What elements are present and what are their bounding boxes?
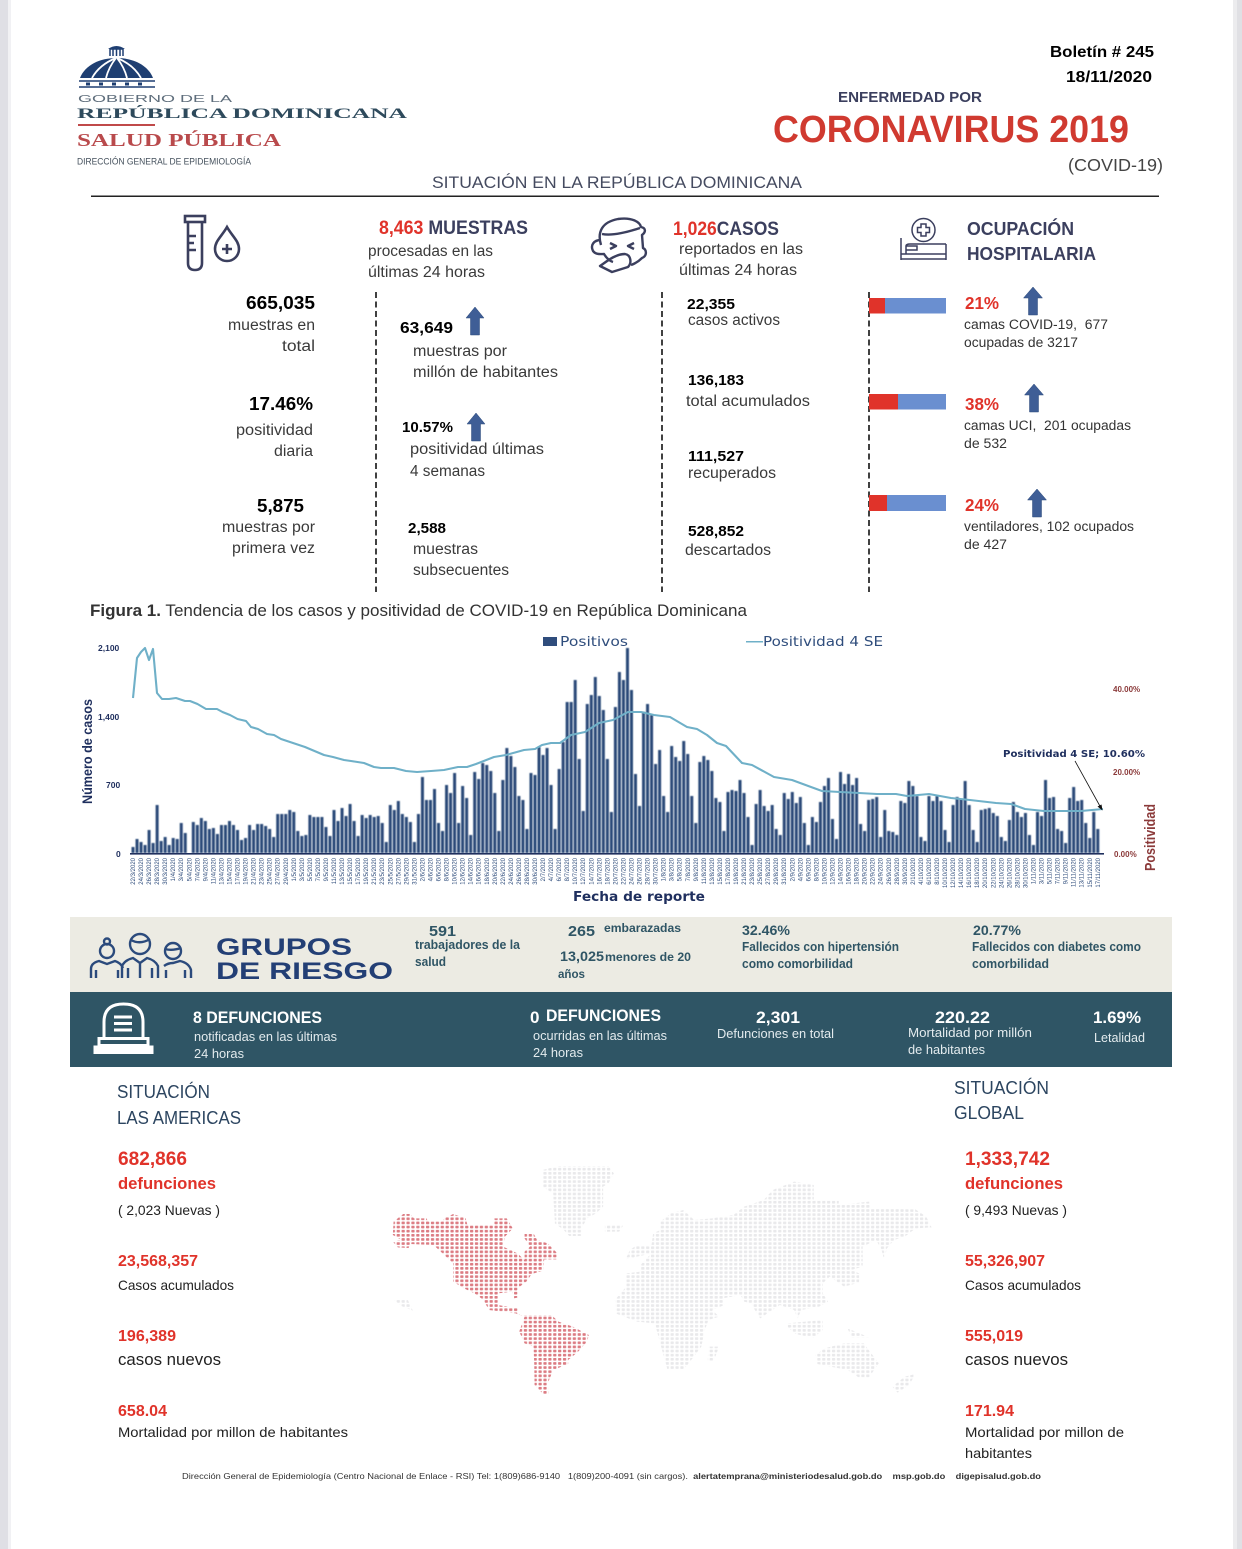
date axis labels: 8/7/2020 bbox=[565, 857, 571, 881]
stat: hypertension comorbidity: 32.46% bbox=[742, 922, 791, 938]
stat: diabetes comorbidity: Fallecidos con diabetes como bbox=[972, 940, 1141, 954]
panel: samples summary: últimas 24 horas bbox=[368, 264, 485, 281]
date axis labels: 15/5/2020 bbox=[348, 857, 354, 885]
date axis labels: 26/9/2020 bbox=[887, 857, 893, 885]
right axis labels: 20.00% bbox=[1113, 768, 1140, 777]
stat: pregnant and minors: 13,025 bbox=[560, 948, 604, 964]
panel: total sample stats bbox=[222, 292, 315, 557]
icon: face with mask bbox=[592, 219, 646, 272]
date axis labels: 24/7/2020 bbox=[629, 857, 635, 885]
stat: 0 defunciones: 24 horas bbox=[533, 1046, 583, 1060]
date axis labels: 6/9/2020 bbox=[806, 857, 812, 881]
stat: 8 defunciones bbox=[193, 1008, 337, 1061]
date axis labels: 30/9/2020 bbox=[903, 857, 909, 885]
date axis labels: 29/5/2020 bbox=[404, 857, 410, 885]
left axis labels bbox=[79, 643, 121, 859]
date axis labels: 4/9/2020 bbox=[798, 857, 804, 881]
stat: health workers: trabajadores de la bbox=[415, 938, 521, 952]
panel: hospital occupancy: camas UCI, 201 ocupadas bbox=[964, 418, 1131, 433]
logo: Gobierno de la República Dominicana, Salud Pública: SALUD PÚBLICA bbox=[77, 129, 281, 150]
logo: Gobierno de la República Dominicana, Salud Pública: DIRECCIÓN GENERAL DE EPIDEMIOLOGÍA bbox=[77, 156, 252, 168]
stat: total deaths: Defunciones en total bbox=[717, 1027, 834, 1041]
date axis labels: 2/10/2020 bbox=[911, 857, 917, 885]
date axis labels: 5/11/2020 bbox=[1048, 857, 1054, 884]
arrow: up bbox=[467, 413, 485, 441]
legend: Positividad 4 SE bbox=[763, 634, 883, 650]
stat: pregnant and minors: menores de 20 bbox=[605, 950, 691, 964]
panel: case stats: total acumulados bbox=[686, 393, 810, 410]
line: positividad 4 SE bbox=[133, 648, 1103, 811]
panel: total sample stats: 17.46% bbox=[249, 393, 313, 414]
title: Enfermedad por coronavirus 2019: ENFERMEDAD POR bbox=[838, 89, 982, 106]
date axis labels: 18/7/2020 bbox=[605, 857, 611, 885]
left axis labels: Número de casos bbox=[79, 699, 95, 804]
left axis labels: 0 bbox=[116, 849, 121, 859]
date axis labels: 22/10/2020 bbox=[991, 857, 997, 888]
callout: positividad 4 SE 10.60%: Positividad 4 SE; 10.60% bbox=[1003, 749, 1146, 760]
panel: total sample stats: primera vez bbox=[232, 540, 315, 557]
date axis labels: 31/8/2020 bbox=[782, 857, 788, 885]
panel: situación global: Mortalidad por millon de bbox=[965, 1424, 1124, 1440]
panel: situación las Américas: defunciones bbox=[118, 1174, 216, 1193]
date axis labels: 6/10/2020 bbox=[927, 857, 933, 885]
arrow: up bbox=[1028, 489, 1046, 517]
Americas bbox=[393, 1214, 589, 1395]
date axis labels: 1/5/2020 bbox=[292, 857, 298, 881]
date axis labels: 17/4/2020 bbox=[236, 857, 242, 885]
stat: diabetes comorbidity: 20.77% bbox=[973, 922, 1022, 938]
date axis labels: 19/5/2020 bbox=[364, 857, 370, 885]
panel: case stats: 136,183 bbox=[688, 372, 744, 389]
logo: Gobierno de la República Dominicana, Salud Pública: GOBIERNO DE LA bbox=[78, 93, 232, 105]
stat: pregnant and minors bbox=[558, 923, 691, 981]
stat: hypertension comorbidity: Fallecidos con hipertensión bbox=[742, 940, 899, 954]
stat: lethality bbox=[1093, 1009, 1145, 1045]
footer: contact information: Dirección General de Epidemiología (Centro Nacional de Enlace - RSI) Tel: 1(809)686-9140 1(809)200-4091 (sin cargos). alertatemprana@ministeriodesalud.gob.do msp.gob.do digepisalud.gob.do bbox=[182, 1471, 1041, 1481]
heading: ocupación hospitalaria: OCUPACIÓN bbox=[967, 218, 1074, 239]
date axis labels: 12/9/2020 bbox=[830, 857, 836, 885]
date axis labels: 26/7/2020 bbox=[638, 857, 644, 885]
stat: 0 defunciones: DEFUNCIONES bbox=[546, 1006, 661, 1025]
panel: situación las Américas: Mortalidad por millon de habitantes bbox=[118, 1424, 348, 1440]
bar: ventilators 24% bbox=[869, 495, 946, 511]
panel: samples per million and positivity: muestras bbox=[413, 541, 478, 558]
heading: situación en la República Dominicana: SITUACIÓN EN LA REPÚBLICA DOMINICANA bbox=[432, 173, 803, 192]
stat: 8 defunciones: notificadas en las últimas bbox=[194, 1030, 337, 1044]
date axis labels: 20/9/2020 bbox=[863, 857, 869, 885]
date axis labels: 3/11/2020 bbox=[1040, 857, 1046, 884]
panel: total sample stats: diaria bbox=[274, 443, 313, 460]
date axis labels: 2/7/2020 bbox=[541, 857, 547, 881]
panel: hospital occupancy: de 427 bbox=[964, 537, 1007, 552]
date axis labels: 20/6/2020 bbox=[493, 857, 499, 885]
stat: hypertension comorbidity: como comorbilidad bbox=[742, 957, 853, 971]
arrow: up bbox=[1024, 287, 1042, 315]
date axis labels: 8/10/2020 bbox=[935, 857, 941, 885]
stat: mortality per million: 220.22 bbox=[935, 1009, 990, 1027]
heading: grupos de riesgo bbox=[216, 934, 393, 985]
date axis labels: 18/10/2020 bbox=[975, 857, 981, 888]
date axis labels: 28/6/2020 bbox=[525, 857, 531, 885]
stat: lethality: 1.69% bbox=[1093, 1009, 1141, 1027]
stat: pregnant and minors: 265 bbox=[568, 923, 595, 940]
date axis labels: 9/8/2020 bbox=[694, 857, 700, 881]
date axis labels: 8/9/2020 bbox=[814, 857, 820, 881]
date axis labels: 11/11/2020 bbox=[1072, 857, 1078, 887]
stat: total deaths bbox=[717, 1009, 834, 1041]
date axis labels: 30/7/2020 bbox=[654, 857, 660, 885]
panel: hospital occupancy: ventiladores, 102 ocupados bbox=[964, 519, 1134, 534]
title: Enfermedad por coronavirus 2019: (COVID-19) bbox=[1068, 155, 1163, 175]
date axis labels: 13/4/2020 bbox=[219, 857, 225, 885]
panel: hospital occupancy: 21% bbox=[965, 293, 999, 313]
date axis labels: 24/9/2020 bbox=[879, 857, 885, 885]
date axis labels: 7/4/2020 bbox=[195, 857, 201, 881]
panel: situación global: 55,326,907 bbox=[965, 1253, 1045, 1270]
heading: figura 1: Figura 1. Tendencia de los casos y positividad de COVID-19 en República Dominicana bbox=[90, 602, 748, 620]
bar: ICU beds 38% bbox=[869, 394, 946, 410]
date axis labels: 25/4/2020 bbox=[268, 857, 274, 885]
panel: total sample stats: 665,035 bbox=[246, 292, 315, 313]
panel: case stats: casos activos bbox=[688, 312, 780, 329]
date axis labels: 23/4/2020 bbox=[260, 857, 266, 885]
date axis labels: 3/5/2020 bbox=[300, 857, 306, 881]
panel: samples per million and positivity: muestras por bbox=[413, 343, 507, 360]
panel: samples per million and positivity: 10.57% bbox=[402, 420, 453, 436]
panel: samples per million and positivity bbox=[400, 307, 558, 579]
date axis labels: 26/6/2020 bbox=[517, 857, 523, 885]
stat: pregnant and minors: embarazadas bbox=[604, 923, 681, 935]
date axis labels: 21/4/2020 bbox=[252, 857, 258, 885]
date axis labels: 5/4/2020 bbox=[187, 857, 193, 881]
panel: case stats: 22,355 bbox=[687, 296, 735, 313]
panel: hospital occupancy: de 532 bbox=[964, 436, 1007, 451]
panel: samples per million and positivity: subsecuentes bbox=[413, 562, 509, 579]
date axis labels: 10/9/2020 bbox=[822, 857, 828, 885]
date axis labels: 17/11/2020 bbox=[1096, 857, 1102, 888]
date axis labels: 14/9/2020 bbox=[839, 857, 845, 885]
stat: total deaths: 2,301 bbox=[756, 1009, 800, 1027]
date axis labels: 2/6/2020 bbox=[420, 857, 426, 881]
right axis labels: 0.00% bbox=[1114, 850, 1137, 859]
panel: total sample stats: total bbox=[282, 338, 315, 355]
arrow: up bbox=[466, 307, 484, 335]
date axis labels: 14/6/2020 bbox=[469, 857, 475, 885]
panel: case stats: 111,527 bbox=[688, 448, 744, 465]
date axis labels: 3/4/2020 bbox=[179, 857, 185, 881]
stat: 0 defunciones bbox=[530, 1006, 667, 1060]
stat: 0 defunciones: 0 bbox=[530, 1008, 539, 1027]
date axis labels: 1/4/2020 bbox=[171, 857, 177, 881]
panel: case stats: descartados bbox=[685, 542, 771, 559]
date axis labels: 21/8/2020 bbox=[742, 857, 748, 885]
panel: situación las Américas: 682,866 bbox=[118, 1149, 187, 1170]
panel: situación global: defunciones bbox=[965, 1174, 1063, 1193]
date axis labels: 14/7/2020 bbox=[589, 857, 595, 885]
panel: situación las Américas: casos nuevos bbox=[118, 1351, 221, 1369]
panel: situación las Américas: 196,389 bbox=[118, 1328, 176, 1345]
date axis labels: 22/6/2020 bbox=[501, 857, 507, 885]
heading: 1,026 casos: 1,026CASOS bbox=[673, 219, 779, 240]
panel: cases summary: últimas 24 horas bbox=[679, 262, 797, 279]
panel: situación las Américas: LAS AMERICAS bbox=[117, 1108, 241, 1128]
date axis labels: 4/6/2020 bbox=[428, 857, 434, 881]
panel: situación las Américas: Casos acumulados bbox=[118, 1277, 234, 1293]
panel: hospital occupancy bbox=[869, 287, 1134, 552]
icon: tombstone bbox=[95, 1004, 152, 1052]
date axis labels: 2/9/2020 bbox=[790, 857, 796, 881]
date axis labels: 25/8/2020 bbox=[758, 857, 764, 885]
stat: health workers bbox=[415, 923, 521, 969]
date axis labels: 28/9/2020 bbox=[895, 857, 901, 885]
date axis labels: 5/8/2020 bbox=[678, 857, 684, 881]
date axis labels: 3/8/2020 bbox=[670, 857, 676, 881]
date axis labels: 27/4/2020 bbox=[276, 857, 282, 885]
panel: situación las Américas bbox=[117, 1081, 348, 1440]
panel: situación global: casos nuevos bbox=[965, 1351, 1068, 1369]
heading: 8,463 muestras: 8,463 MUESTRAS bbox=[379, 218, 528, 239]
panel: total sample stats: muestras en bbox=[228, 317, 315, 334]
legend: Positivos bbox=[560, 634, 628, 650]
date axis labels: 23/8/2020 bbox=[750, 857, 756, 885]
x axis title: Fecha de reporte bbox=[573, 889, 705, 905]
panel: situación las Américas: SITUACIÓN bbox=[117, 1081, 210, 1102]
panel: hospital occupancy: ocupadas de 3217 bbox=[964, 335, 1078, 350]
stat: 0 defunciones: ocurridas en las últimas bbox=[533, 1029, 667, 1043]
date axis labels: 23/5/2020 bbox=[380, 857, 386, 885]
panel: situación global: 171.94 bbox=[965, 1403, 1014, 1420]
panel: situación global: habitantes bbox=[965, 1445, 1032, 1461]
date axis labels: 16/7/2020 bbox=[597, 857, 603, 885]
stat: pregnant and minors: años bbox=[558, 967, 585, 981]
date axis labels: 28/3/2020 bbox=[155, 857, 161, 885]
panel: defunciones bbox=[70, 992, 1172, 1067]
date axis labels: 16/6/2020 bbox=[477, 857, 483, 885]
date axis labels: 6/7/2020 bbox=[557, 857, 563, 881]
date axis labels: 1/8/2020 bbox=[662, 857, 668, 881]
icon: test tube and blood drop bbox=[185, 216, 239, 270]
date axis labels: 7/11/2020 bbox=[1056, 857, 1062, 884]
logo: Gobierno de la República Dominicana, Salud Pública bbox=[77, 46, 408, 168]
date axis labels: 17/5/2020 bbox=[356, 857, 362, 885]
chart: positive cases and 4-week positivity bbox=[79, 634, 1159, 905]
date axis labels: 10/10/2020 bbox=[943, 857, 949, 888]
date axis labels bbox=[131, 857, 1102, 888]
date axis labels: 27/5/2020 bbox=[396, 857, 402, 885]
date axis labels: 24/10/2020 bbox=[999, 857, 1005, 888]
date axis labels: 26/3/2020 bbox=[147, 857, 153, 885]
panel: situación global: GLOBAL bbox=[954, 1103, 1024, 1123]
panel: situación las Américas: 23,568,357 bbox=[118, 1253, 198, 1270]
dashed column dividers bbox=[376, 292, 869, 592]
date axis labels: 21/5/2020 bbox=[372, 857, 378, 885]
date axis labels: 10/7/2020 bbox=[573, 857, 579, 885]
date axis labels: 13/5/2020 bbox=[340, 857, 346, 885]
panel: samples per million and positivity: millón de habitantes bbox=[413, 364, 558, 381]
stat: lethality: Letalidad bbox=[1094, 1031, 1145, 1045]
date axis labels: 6/6/2020 bbox=[437, 857, 443, 881]
date axis labels: 14/10/2020 bbox=[959, 857, 965, 888]
date axis labels: 9/4/2020 bbox=[203, 857, 209, 881]
icon: hospital bed bbox=[901, 218, 946, 260]
heading: ocupación hospitalaria: HOSPITALARIA bbox=[967, 243, 1096, 264]
date axis labels: 20/10/2020 bbox=[983, 857, 989, 888]
panel: total sample stats: positividad bbox=[236, 422, 313, 439]
panel: situación global: 555,019 bbox=[965, 1328, 1023, 1345]
panel: hospital occupancy: camas COVID-19, 677 bbox=[964, 317, 1108, 332]
panel: samples summary: procesadas en las bbox=[368, 243, 493, 260]
date axis labels: 19/8/2020 bbox=[734, 857, 740, 885]
panel: situación global: SITUACIÓN bbox=[954, 1077, 1049, 1098]
date axis labels: 12/7/2020 bbox=[581, 857, 587, 885]
date axis labels: 13/8/2020 bbox=[710, 857, 716, 885]
date axis labels: 8/6/2020 bbox=[445, 857, 451, 881]
panel: cases summary: reportados en las bbox=[679, 241, 803, 258]
date axis labels: 11/5/2020 bbox=[332, 857, 338, 884]
map: world with the Americas highlighted bbox=[393, 1166, 932, 1395]
panel: situación las Américas: ( 2,023 Nuevas ) bbox=[118, 1202, 220, 1218]
date axis labels: 4/10/2020 bbox=[919, 857, 925, 885]
heading: grupos de riesgo: GRUPOS bbox=[216, 934, 352, 961]
panel: samples summary bbox=[368, 218, 528, 281]
date axis labels: 12/10/2020 bbox=[951, 857, 957, 888]
date axis labels: 1/11/2020 bbox=[1031, 857, 1037, 884]
stat: health workers: salud bbox=[415, 955, 446, 969]
header: bulletin number and date: Boletín # 245 bbox=[1050, 44, 1154, 61]
date axis labels: 31/5/2020 bbox=[412, 857, 418, 885]
stat: mortality per million bbox=[908, 1009, 1032, 1057]
panel: samples per million and positivity: 4 semanas bbox=[410, 463, 485, 480]
icon: three people bbox=[91, 934, 191, 978]
stat: mortality per million: Mortalidad por millón bbox=[908, 1026, 1032, 1040]
date axis labels: 4/7/2020 bbox=[549, 857, 555, 881]
panel: grupos de riesgo bbox=[70, 917, 1172, 992]
logo: Gobierno de la República Dominicana, Salud Pública: REPÚBLICA DOMINICANA bbox=[77, 105, 408, 122]
date axis labels: 7/5/2020 bbox=[316, 857, 322, 881]
panel: situación global: 1,333,742 bbox=[965, 1149, 1050, 1170]
panel: total sample stats: 5,875 bbox=[257, 495, 304, 516]
stat: hypertension comorbidity bbox=[742, 922, 899, 971]
legend bbox=[543, 634, 883, 650]
date axis labels: 20/7/2020 bbox=[613, 857, 619, 885]
stat: mortality per million: de habitantes bbox=[908, 1043, 985, 1057]
panel: situación global bbox=[954, 1077, 1124, 1461]
date axis labels: 29/4/2020 bbox=[284, 857, 290, 885]
panel: case stats bbox=[685, 296, 810, 559]
panel: situación las Américas: 658.04 bbox=[118, 1403, 167, 1420]
date axis labels: 18/6/2020 bbox=[485, 857, 491, 885]
right axis labels: 40.00% bbox=[1113, 685, 1140, 694]
date axis labels: 22/3/2020 bbox=[131, 857, 137, 885]
header: bulletin number and date: 18/11/2020 bbox=[1066, 69, 1152, 86]
left axis labels: 1,400 bbox=[98, 712, 120, 722]
date axis labels: 30/6/2020 bbox=[533, 857, 539, 885]
date axis labels: 26/10/2020 bbox=[1007, 857, 1013, 888]
stat: diabetes comorbidity bbox=[972, 922, 1141, 971]
date axis labels: 24/6/2020 bbox=[509, 857, 515, 885]
stat: 8 defunciones: 24 horas bbox=[194, 1047, 244, 1061]
rest of the world bbox=[394, 1166, 932, 1393]
date axis labels: 11/4/2020 bbox=[211, 857, 217, 884]
bars: daily positive cases bbox=[133, 648, 1098, 853]
date axis labels: 27/8/2020 bbox=[766, 857, 772, 885]
date axis labels: 5/5/2020 bbox=[308, 857, 314, 881]
header: bulletin number and date bbox=[1050, 44, 1154, 86]
arrow: up bbox=[1024, 384, 1044, 412]
date axis labels: 22/7/2020 bbox=[621, 857, 627, 885]
date axis labels: 16/10/2020 bbox=[967, 857, 973, 888]
panel: hospital occupancy: 38% bbox=[965, 394, 999, 414]
date axis labels: 30/10/2020 bbox=[1023, 857, 1029, 888]
date axis labels: 9/11/2020 bbox=[1064, 857, 1070, 884]
date axis labels: 15/8/2020 bbox=[718, 857, 724, 885]
date axis labels: 10/6/2020 bbox=[453, 857, 459, 885]
date axis labels: 24/3/2020 bbox=[139, 857, 145, 885]
date axis labels: 15/4/2020 bbox=[227, 857, 233, 885]
date axis labels: 25/5/2020 bbox=[388, 857, 394, 885]
bar: COVID-19 beds 21% bbox=[869, 298, 946, 314]
date axis labels: 13/11/2020 bbox=[1080, 857, 1086, 888]
panel: case stats: 528,852 bbox=[688, 523, 744, 540]
date axis labels: 28/7/2020 bbox=[646, 857, 652, 885]
panel: samples per million and positivity: 2,588 bbox=[408, 521, 446, 537]
date axis labels: 30/3/2020 bbox=[163, 857, 169, 885]
date axis labels: 12/6/2020 bbox=[461, 857, 467, 885]
title: Enfermedad por coronavirus 2019: CORONAVIRUS 2019 bbox=[773, 109, 1129, 151]
panel: total sample stats: muestras por bbox=[222, 519, 315, 536]
panel: situación global: Casos acumulados bbox=[965, 1277, 1081, 1293]
panel: samples per million and positivity: positividad últimas bbox=[410, 441, 544, 458]
stat: 8 defunciones: 8 DEFUNCIONES bbox=[193, 1008, 322, 1027]
baseline axis bbox=[130, 853, 1104, 855]
callout: positividad 4 SE 10.60% bbox=[1003, 749, 1146, 810]
left axis labels: 700 bbox=[106, 780, 120, 790]
date axis labels: 11/8/2020 bbox=[702, 857, 708, 884]
heading: ocupación hospitalaria bbox=[967, 218, 1096, 264]
heading: grupos de riesgo: DE RIESGO bbox=[216, 958, 393, 985]
left axis labels: 2,100 bbox=[98, 643, 120, 653]
icon: dome bbox=[79, 46, 155, 87]
panel: situación global: ( 9,493 Nuevas ) bbox=[965, 1202, 1067, 1218]
date axis labels: 19/4/2020 bbox=[244, 857, 250, 885]
date axis labels: 29/8/2020 bbox=[774, 857, 780, 885]
date axis labels: 28/10/2020 bbox=[1015, 857, 1021, 888]
date axis labels: 15/11/2020 bbox=[1088, 857, 1094, 888]
date axis labels: 9/5/2020 bbox=[324, 857, 330, 881]
panel: samples per million and positivity: 63,649 bbox=[400, 320, 453, 337]
date axis labels: 18/9/2020 bbox=[855, 857, 861, 885]
title: Enfermedad por coronavirus 2019 bbox=[773, 89, 1163, 175]
panel: hospital occupancy: 24% bbox=[965, 495, 999, 515]
right axis labels: Positividad bbox=[1142, 804, 1159, 871]
date axis labels: 17/8/2020 bbox=[726, 857, 732, 885]
panel: case stats: recuperados bbox=[688, 465, 776, 482]
stat: health workers: 591 bbox=[429, 923, 456, 940]
right axis labels bbox=[1113, 685, 1159, 871]
date axis labels: 7/8/2020 bbox=[686, 857, 692, 881]
date axis labels: 16/9/2020 bbox=[847, 857, 853, 885]
stat: diabetes comorbidity: comorbilidad bbox=[972, 957, 1049, 971]
date axis labels: 22/9/2020 bbox=[871, 857, 877, 885]
panel: cases summary bbox=[673, 219, 803, 279]
